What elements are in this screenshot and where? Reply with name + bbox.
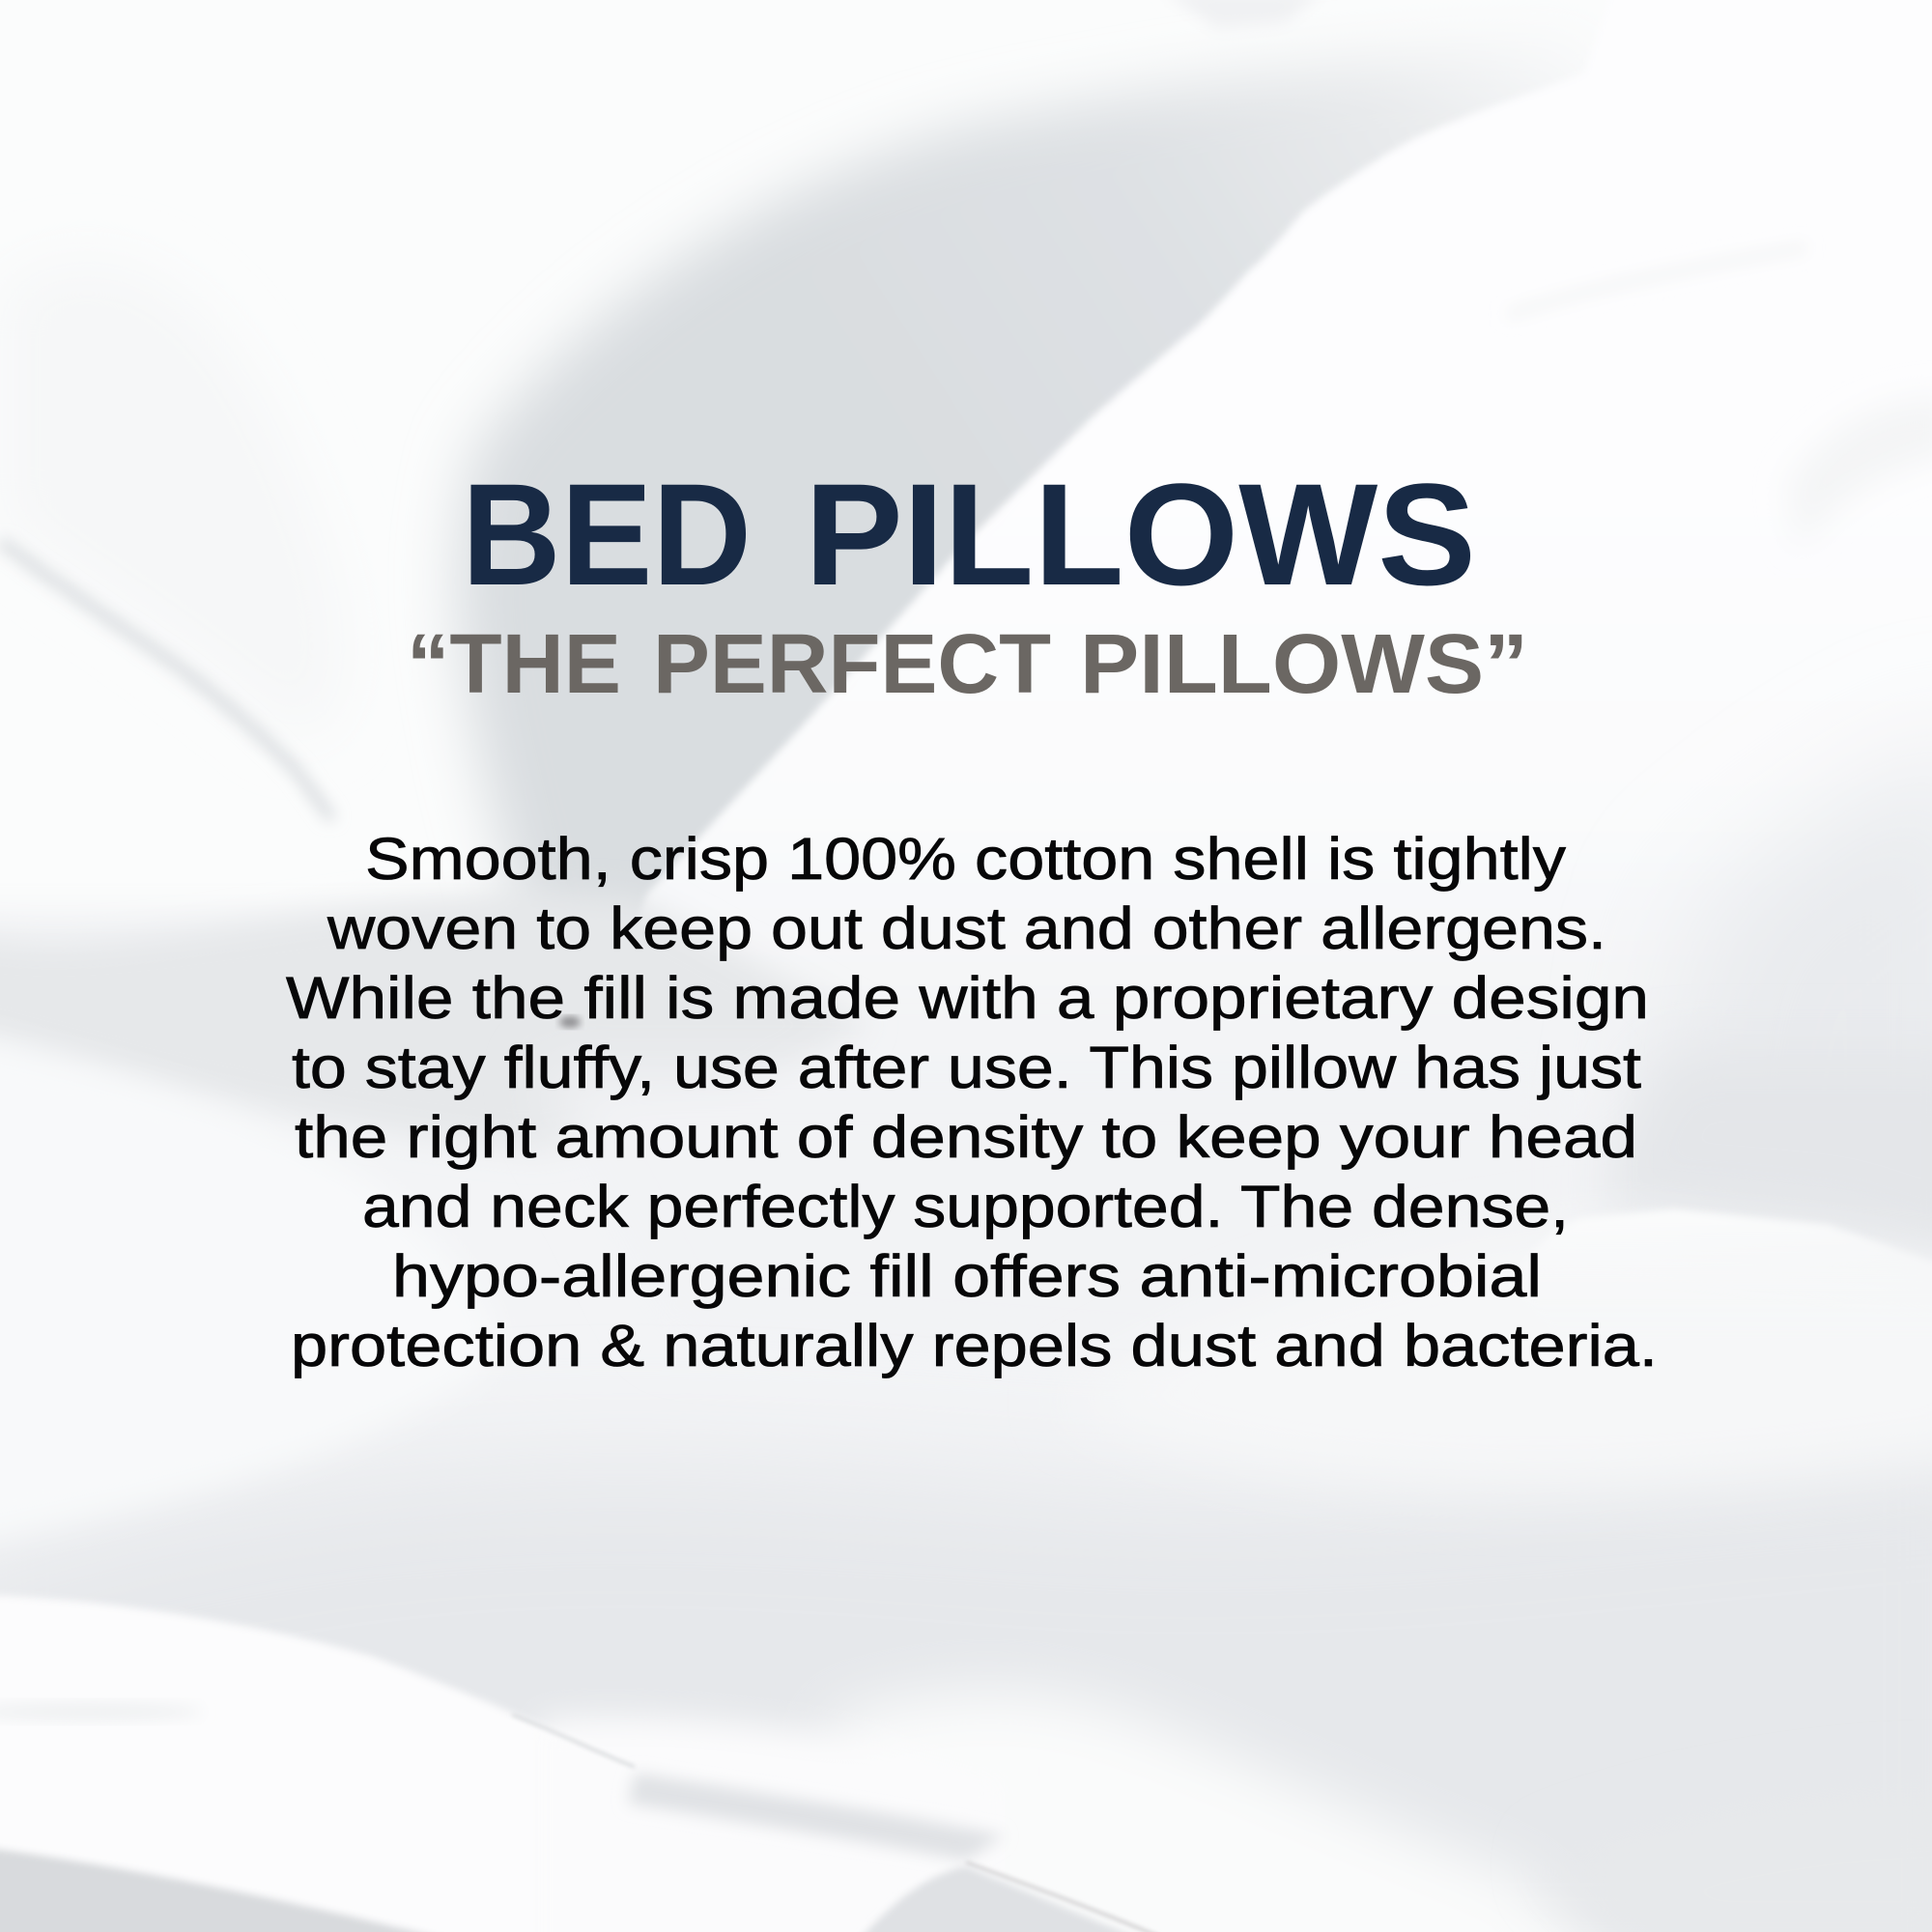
crease to the bottom edge	[966, 1862, 1159, 1932]
subtitle: PILLOWS”	[1080, 617, 1528, 711]
bottom centre shadow	[850, 1866, 1169, 1932]
fold pinch	[559, 1016, 581, 1028]
left white fold	[0, 1036, 495, 1546]
right side shadow above fold	[1642, 734, 1932, 1275]
lower right white duvet	[831, 1691, 1671, 1932]
bottom right tone	[1546, 1787, 1932, 1932]
description text block: woven to keep out dust and other allergens.	[327, 895, 1606, 961]
description text block: to stay fluffy, use after use. This pillow has just	[292, 1035, 1641, 1100]
subtitle	[407, 617, 1528, 711]
right white fold crisp top	[1507, 1209, 1932, 1372]
description text block: Smooth, crisp 100% cotton shell is tightly	[365, 826, 1567, 892]
title: PILLOWS	[805, 453, 1476, 615]
gray pillow shadow	[457, 39, 1604, 1005]
description text block: the right amount of density to keep your head	[295, 1104, 1637, 1170]
lower centre duvet blend	[541, 1718, 1005, 1932]
left crease	[0, 542, 332, 819]
title: BED	[462, 453, 752, 615]
right white fold soft body	[1063, 1232, 1932, 1488]
description text block: hypo-allergenic fill offers anti-microbial	[392, 1243, 1542, 1309]
left pillow soft wrinkles	[0, 261, 344, 736]
left band under pillow	[0, 894, 869, 1150]
description text block: While the fill is made with a proprietary design	[286, 965, 1649, 1031]
description text block: protection & naturally repels dust and bacteria.	[291, 1313, 1658, 1378]
lower wide gray band	[0, 1430, 1932, 1932]
subtitle: “THE	[407, 617, 621, 711]
mid centre light tone	[541, 1072, 1584, 1372]
bright pillow on the right with crisp edge	[599, 0, 1932, 1024]
description text block	[286, 826, 1658, 1378]
top gray patch	[1163, 0, 1323, 29]
title	[462, 453, 1476, 615]
top white area	[0, 0, 1932, 908]
fold shadow patch	[628, 1773, 1005, 1861]
description text block: and neck perfectly supported. The dense,	[362, 1174, 1569, 1239]
left duvet smudge	[0, 1703, 203, 1720]
thin fold crease	[512, 1715, 635, 1767]
subtitle: PERFECT	[653, 617, 1051, 711]
lower left white duvet	[0, 1594, 599, 1932]
bottom left shadow	[0, 1847, 493, 1932]
right pillow faint wrinkles	[1507, 242, 1806, 321]
